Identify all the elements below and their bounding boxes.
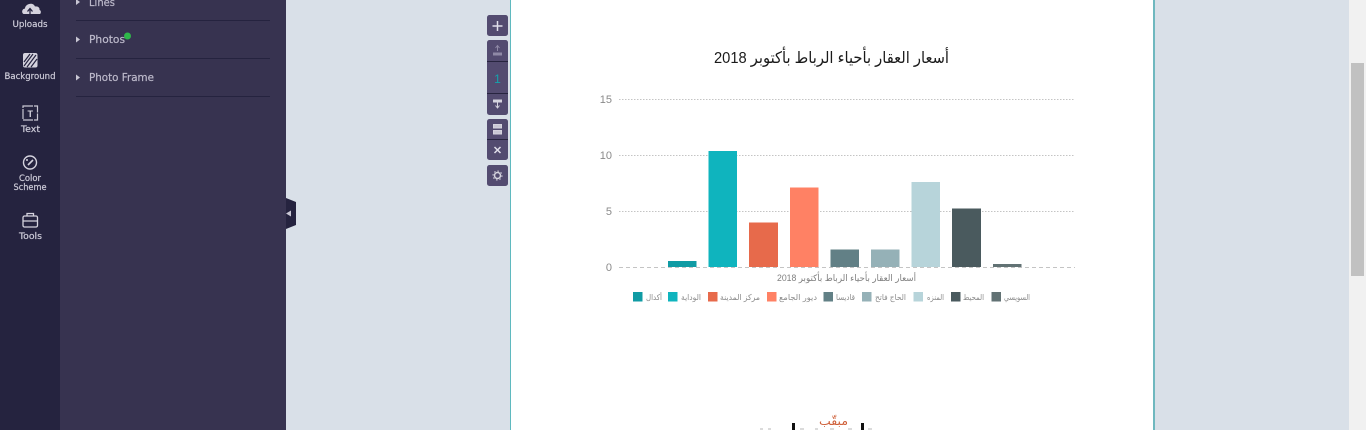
menu item: Photo Frame: Photo Frame	[89, 71, 154, 84]
x-axis label: أسعار العقار بأحياء الرباط بأكتوبر 2018	[777, 271, 916, 283]
label: Tools: Tools	[18, 232, 42, 242]
button group: move page: 1	[494, 72, 501, 86]
menu item: Photos: Photos	[89, 33, 125, 46]
y-axis labels: 10	[600, 150, 612, 162]
chart legend: الوداية	[681, 293, 701, 302]
icon: text	[23, 106, 38, 120]
menu item: Lines	[76, 0, 115, 9]
button: settings	[487, 165, 508, 186]
bar chart	[600, 94, 1075, 283]
panel: element menu	[60, 0, 286, 430]
label: Color Scheme	[14, 174, 47, 193]
label: Color Scheme: Scheme	[14, 183, 47, 193]
label: Background: Background	[4, 72, 56, 82]
chart legend: المنزه	[927, 293, 944, 302]
icon: uploads	[22, 4, 41, 14]
label: Color Scheme: Color	[19, 174, 41, 184]
button group: duplicate and delete	[487, 119, 508, 160]
chart legend	[633, 292, 1030, 302]
cropped next-section heading	[760, 414, 872, 430]
icon: text: T	[27, 109, 33, 119]
menu item: Photos	[76, 32, 131, 46]
scrollbar	[1349, 0, 1366, 430]
chart legend: أكدال	[646, 292, 662, 302]
page toolbar	[487, 15, 508, 186]
icon: color scheme	[24, 156, 36, 169]
canvas page	[510, 0, 1155, 430]
y-axis labels: 15	[600, 94, 612, 106]
y-axis labels	[600, 94, 612, 274]
chart legend: الحاج فاتح	[875, 293, 906, 302]
bars	[668, 151, 1022, 267]
y-axis labels: 5	[606, 206, 612, 218]
icon rail	[0, 0, 60, 430]
icon: background	[23, 53, 38, 68]
y-axis labels: 0	[606, 262, 612, 274]
button: add	[487, 15, 508, 36]
icon: tools	[23, 214, 38, 227]
chart legend: مركز المدينة	[720, 293, 760, 302]
chart legend: ديور الجامع	[779, 293, 817, 302]
chart legend: السويسي	[1004, 293, 1030, 302]
chart legend: قاديسا	[836, 293, 855, 302]
panel collapse tab	[286, 198, 296, 229]
chart title: أسعار العقار بأحياء الرباط بأكتوبر 2018	[714, 46, 949, 68]
cropped next-section heading: مبقّب	[819, 414, 848, 428]
label: Uploads: Uploads	[12, 20, 48, 30]
label: Text: Text	[20, 125, 40, 135]
button group: move page	[487, 40, 508, 115]
chart legend: المحيط	[963, 293, 984, 302]
